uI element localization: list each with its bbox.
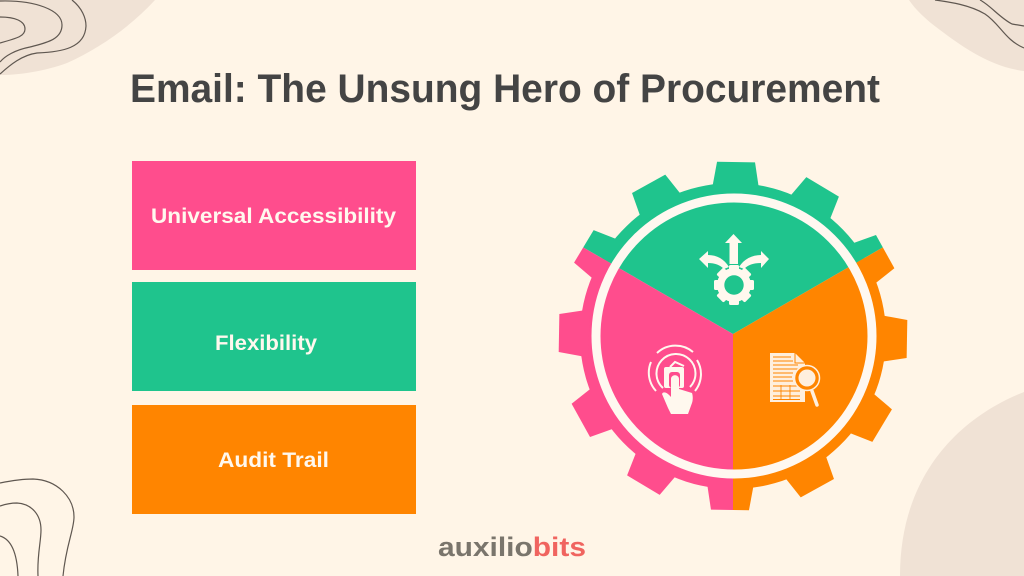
logo: auxiliobits: auxilio bits — [438, 532, 586, 562]
gear segment: green — [583, 162, 883, 334]
panel: Audit Trail — [132, 405, 416, 514]
panel: Universal Accessibility: Universal Accessibility — [151, 204, 396, 228]
icon: gear with three arrows — [699, 234, 769, 305]
panel: Flexibility — [132, 282, 416, 391]
icon: document with magnifying glass — [770, 353, 820, 405]
gear segment: pink — [558, 248, 733, 510]
gear segment: orange — [733, 247, 908, 510]
decoration: top-right blob with contour lines — [909, 0, 1024, 71]
chart: three-segment gear — [556, 159, 910, 513]
gear white ring — [596, 198, 872, 474]
panel: Audit Trail: Audit Trail — [218, 448, 329, 472]
decoration: top-left blob with contour lines — [0, 0, 155, 75]
panel: Universal Accessibility — [132, 161, 416, 270]
icon: hand pressing padlock — [649, 346, 701, 414]
decoration: bottom-right blob — [900, 392, 1024, 576]
panel: Flexibility: Flexibility — [215, 331, 317, 355]
title: Email: The Unsung Hero of Procurement — [130, 67, 880, 111]
decoration: bottom-left contour lines — [0, 479, 74, 576]
